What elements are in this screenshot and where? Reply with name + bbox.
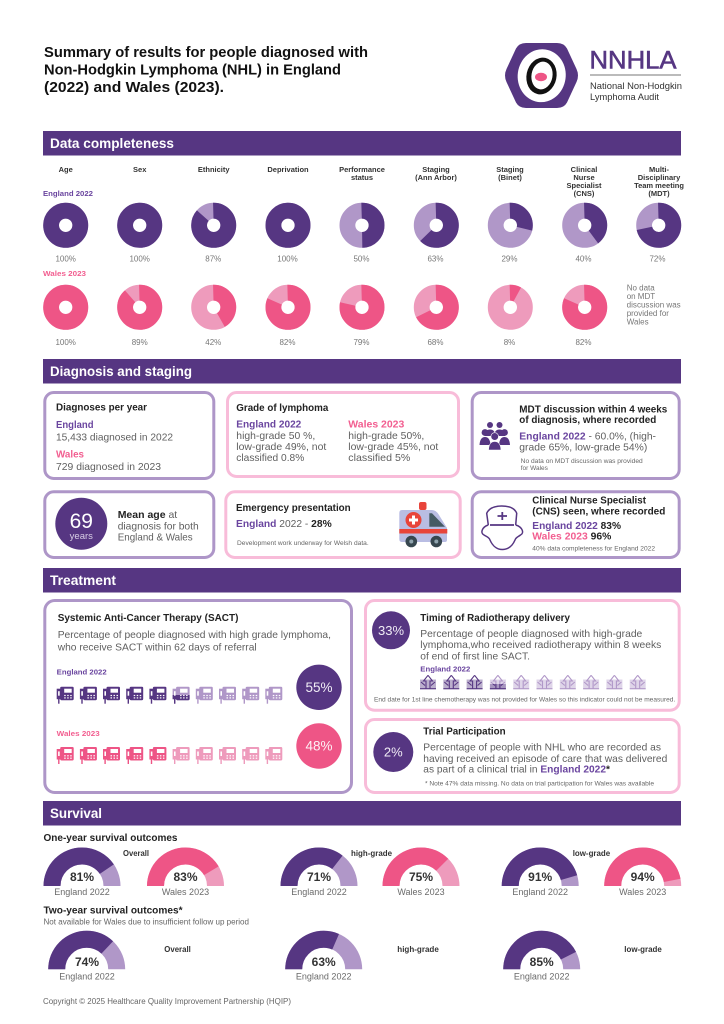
note: no MDT data for Wales: No data [627,284,655,292]
panel: data completeness column labels: Ethnicity [198,165,230,174]
heading bar: Treatment: Treatment [50,572,116,588]
Wales completeness percentages: 8% [504,338,515,347]
panel: trial participation: * Note 47% data missing. No data on trial participation for Wales was available [425,780,654,787]
panel: data completeness column labels: Multi- [649,165,669,174]
chart: one-year low-grade survival: low-grade [573,849,611,858]
panel: clinical nurse specialist: England 2022 83% [532,520,622,532]
heading: two-year survival outcomes [44,904,249,926]
chart: Wales data completeness donuts [51,293,599,322]
panel: clinical nurse specialist: Wales 2023 96% [532,531,612,543]
panel: timing of radiotherapy delivery: End date for 1st line chemotherapy was not provided for Wales so this indicator could not be measured. [374,696,675,703]
panel: diagnoses per year: Diagnoses per year [56,402,147,414]
chart: one-year low-grade survival: 91% [528,870,553,884]
stat circle: 55%: 55% [305,680,333,695]
panel: grade of lymphoma [228,392,458,476]
Wales completeness percentages: 89% [132,338,148,347]
panel: data completeness column labels: Staging [496,165,524,174]
panel: emergency presentation [226,492,460,558]
panel: grade of lymphoma: high-grade 50 %, [236,430,315,442]
panel: clinical nurse specialist: 40% data completeness for England 2022 [532,545,655,552]
Wales 2023 label: Wales 2023 [43,269,86,278]
chart: one-year low-grade survival: England 2022 [512,887,568,897]
Wales completeness percentages: 82% [279,338,296,347]
panel: data completeness column labels: Sex [133,165,147,174]
panel: MDT discussion: England 2022 - 60.0%, (high- [519,430,656,442]
panel: emergency presentation: England 2022 - 28% [236,518,332,530]
panel: timing of radiotherapy delivery [366,600,679,710]
note: no MDT data for Wales: Wales [627,318,649,326]
chart: two-year overall survival: Overall [164,945,191,954]
panel: diagnoses per year: 729 diagnosed in 2023 [56,461,161,473]
stat circle: 2% [373,732,413,772]
panel: diagnoses per year [45,392,214,478]
chart: one-year high-grade survival: Wales 2023 [397,887,445,897]
stat circle: 69 years [55,498,107,550]
panel: data completeness column labels: Specialist [566,181,602,190]
panel: data completeness column labels: (Ann Arbor) [415,173,457,182]
panel: data completeness column labels: Deprivation [267,165,309,174]
chart: one-year overall survival: Wales 2023 [162,887,209,897]
Wales completeness percentages: 82% [575,338,592,347]
panel: grade of lymphoma: classified 0.8% [236,452,304,464]
heading: two-year survival outcomes: Not available for Wales due to insufficient follow up period [44,918,249,926]
chart: one-year high-grade survival [289,849,451,897]
heading: one-year survival outcomes: One-year survival outcomes [44,832,178,844]
panel: emergency presentation: Development work underway for Welsh data. [237,540,369,547]
panel: grade of lymphoma: Wales 2023 [348,419,404,431]
panel: Systemic Anti-Cancer Therapy: Percentage of people diagnosed with high grade lymphoma, [58,629,331,641]
icon row: radiotherapy machines 33% [420,675,646,689]
chart: two-year overall survival: 74% [75,955,99,969]
panel: clinical nurse specialist: Clinical Nurse Specialist [532,496,647,506]
panel: Systemic Anti-Cancer Therapy: who receive SACT within 62 days of referral [57,642,257,654]
England completeness percentages: 50% [353,254,370,264]
panel: trial participation: Trial Participation [423,726,506,738]
stat circle: 33% [372,611,410,649]
stat circle: 55% [296,665,342,710]
logo: NNHLA: National Non-Hodgkin [590,81,682,92]
heading bar: Data completeness [43,131,681,156]
England completeness percentages: 100% [55,254,76,264]
panel: grade of lymphoma: Grade of lymphoma [236,403,329,414]
panel: data completeness column labels: Age [59,165,73,174]
icon row: England infusion pumps 55% [57,687,282,704]
heading bar: Survival [43,801,681,826]
panel: timing of radiotherapy delivery: Percentage of people diagnosed with high-grade [420,628,642,640]
Wales completeness percentages: 42% [205,338,221,347]
title: Summary of results for people diagnosed with [44,44,368,61]
panel: data completeness column labels: Performance [339,165,385,174]
panel: data completeness column labels: Clinical [571,165,597,174]
title: Non-Hodgkin Lymphoma (NHL) in England [44,62,341,78]
panel: diagnoses per year: 15,433 diagnosed in 2022 [56,431,173,443]
panel: timing of radiotherapy delivery: of end of first line SACT. [420,650,530,662]
panel: mean age: England & Wales [118,531,193,543]
chart: two-year high-grade survival [294,939,439,981]
panel: mean age [45,492,214,558]
panel: diagnoses per year: Wales [56,449,84,461]
panel: grade of lymphoma: England 2022 [236,419,301,431]
panel: data completeness column labels: (Binet) [498,173,522,182]
panel: data completeness column labels [59,165,684,198]
panel: Systemic Anti-Cancer Therapy: Systemic Anti-Cancer Therapy (SACT) [58,613,238,624]
panel: clinical nurse specialist [472,492,679,558]
heading bar: Treatment [43,568,681,592]
icon: ambulance [399,502,447,547]
chart: one-year high-grade survival: England 2022 [291,887,347,897]
logo: NNHLA [505,43,682,108]
panel: MDT discussion: MDT discussion within 4 weeks [519,404,668,416]
logo: NNHLA: Lymphoma Audit [590,92,659,103]
panel: grade of lymphoma: low-grade 45%, not [348,441,438,453]
note: no MDT data for Wales: on MDT [627,292,655,301]
panel: data completeness column labels: (CNS) [574,189,595,198]
chart: two-year high-grade survival: England 2022 [296,971,351,981]
chart: one-year high-grade survival: high-grade [351,849,393,858]
panel: data completeness column labels: (MDT) [648,189,670,198]
heading: two-year survival outcomes: Two-year survival outcomes* [44,904,183,916]
panel: grade of lymphoma: high-grade 50%, [348,430,424,442]
icon: nurse head [482,506,523,550]
heading bar: Data completeness: Data completeness [50,135,174,151]
Wales completeness percentages: 68% [427,338,444,347]
England completeness percentages: 29% [501,254,518,264]
panel: data completeness column labels: Disciplinary [638,173,681,182]
panel: emergency presentation: Emergency presentation [236,503,351,514]
panel: mean age: Mean age at [118,509,177,521]
England completeness percentages: 40% [575,254,592,264]
Wales completeness percentages: 79% [353,338,370,347]
chart: one-year overall survival: 81% [70,870,94,884]
panel: trial participation [366,720,679,792]
panel: Systemic Anti-Cancer Therapy: Wales 2023 [57,729,100,738]
heading bar: Survival: Survival [50,805,102,821]
panel: timing of radiotherapy delivery: lymphoma,who received radiotherapy within 8 weeks [420,639,661,651]
chart: one-year overall survival [52,849,216,897]
panel: data completeness column labels: Team meeting [634,181,684,190]
chart: England data completeness donuts [51,211,673,240]
panel: MDT discussion: for Wales [521,465,549,472]
logo: NNHLA: NNHLA [590,46,677,74]
panel: MDT discussion [472,392,679,478]
title [44,44,368,96]
chart: two-year low-grade survival: England 2022 [514,971,569,981]
chart: two-year low-grade survival: low-grade [624,945,662,954]
chart: one-year overall survival: 83% [173,870,198,884]
panel: clinical nurse specialist: (CNS) seen, where recorded [532,506,665,518]
stat circle: 48% [296,723,342,769]
England 2022 label: England 2022 [43,189,93,198]
Wales completeness percentages: 100% [55,338,76,347]
stat circle: 33%: 33% [378,623,404,638]
England completeness percentages: 100% [129,254,150,264]
panel: diagnoses per year: England [56,419,94,431]
panel: MDT discussion: No data on MDT discussion was provided [521,458,643,465]
panel: MDT discussion: grade 65%, low-grade 54%) [519,442,647,454]
panel: timing of radiotherapy delivery: Timing of Radiotherapy delivery [420,613,570,624]
chart: one-year low-grade survival: 94% [631,870,655,884]
panel: MDT discussion: of diagnosis, where recorded [519,415,656,426]
England completeness percentages: 72% [649,254,666,264]
title: (2022) and Wales (2023). [44,79,224,96]
panel: data completeness column labels: Nurse [573,173,595,182]
panel: Systemic Anti-Cancer Therapy: England 2022 [57,668,107,677]
stat circle: 48%: 48% [305,739,333,754]
chart: two-year high-grade survival: high-grade [397,945,439,954]
chart: one-year overall survival: Overall [123,849,149,858]
stat circle: 69 years: 69 [70,510,93,533]
note: no MDT data for Wales: provided for [627,309,669,318]
England completeness percentages: 87% [205,254,221,264]
panel: data completeness column labels: Staging [422,165,450,174]
note: no MDT data for Wales: discussion was [627,300,681,310]
panel: trial participation: Percentage of people with NHL who are recorded as [423,742,661,754]
chart: one-year high-grade survival: 75% [409,870,433,884]
panel: trial participation: having received an episode of care that was delivered [423,753,667,765]
England completeness percentages [55,254,666,264]
chart: one-year overall survival: England 2022 [54,887,110,897]
chart: two-year low-grade survival [512,939,662,981]
chart: two-year overall survival [57,939,191,981]
icon: group of people [480,422,510,450]
heading bar: Diagnosis and staging: Diagnosis and staging [50,363,192,379]
England completeness percentages: 100% [277,254,298,264]
Wales completeness percentages [55,338,592,347]
panel: mean age: diagnosis for both [118,520,199,532]
England completeness percentages: 63% [427,254,444,264]
panel: data completeness column labels: status [351,173,373,182]
note: no MDT data for Wales [627,284,681,326]
chart: two-year overall survival: England 2022 [59,971,115,981]
panel: trial participation: as part of a clinical trial in England 2022* [423,764,611,776]
heading bar: Diagnosis and staging [43,359,681,384]
panel: grade of lymphoma: low-grade 49%, not [236,441,326,453]
stat circle: 69 years: years [70,531,93,542]
panel: timing of radiotherapy delivery: England 2022 [420,664,470,674]
icon row: Wales infusion pumps 48% [57,747,282,764]
chart: two-year low-grade survival: 85% [530,955,554,969]
chart: two-year high-grade survival: 63% [312,955,336,969]
chart: one-year low-grade survival [510,849,673,897]
panel: Systemic Anti-Cancer Therapy [45,600,352,792]
panel: grade of lymphoma: classified 5% [348,452,410,464]
footer: copyright: Copyright © 2025 Healthcare Quality Improvement Partnership (HQIP) [43,997,291,1006]
chart: one-year high-grade survival: 71% [307,870,331,884]
chart: one-year low-grade survival: Wales 2023 [619,887,666,897]
stat circle: 2%: 2% [384,745,403,760]
